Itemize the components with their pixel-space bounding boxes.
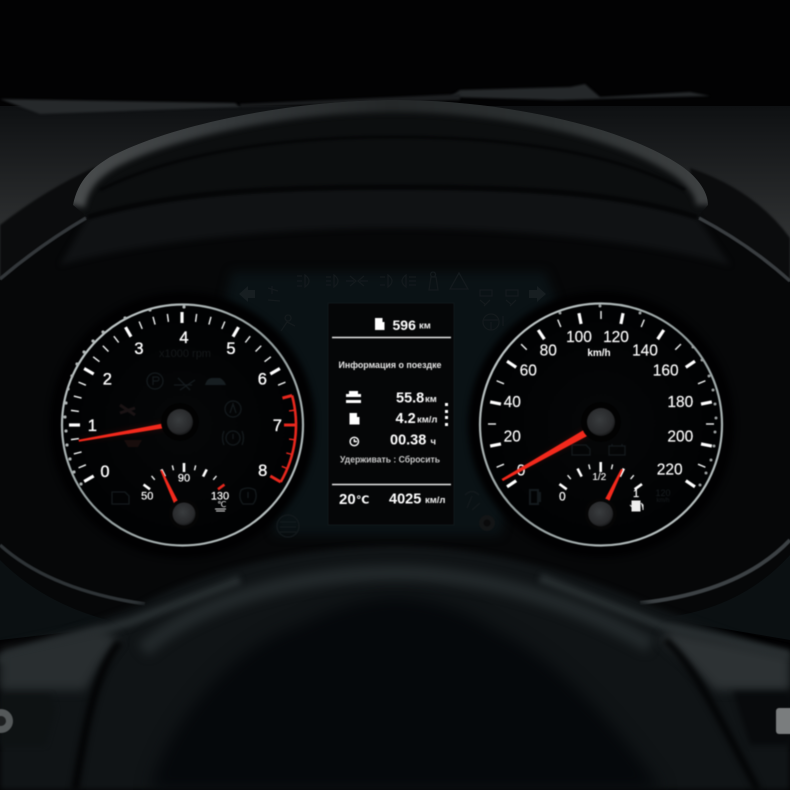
instrument housing [0,167,790,640]
tachometer numerals: 4 [179,329,189,347]
icon: seatbelt warn [120,405,135,415]
time row: ч [430,436,436,448]
tachometer numerals: 0 [100,463,110,481]
trip information heading: Информация о поездке [338,360,442,370]
icon: ABS [225,401,241,417]
fuel gauge labels: 1 [633,488,639,500]
tachometer numerals: 1 [88,417,97,435]
speedometer rim lights [558,304,718,486]
right wheel seam [665,640,758,790]
speedometer numerals: 160 [653,362,679,380]
icon: hazard triangle [450,273,468,289]
icon: car [205,378,226,385]
outside temperature [339,491,369,508]
distance row: км [425,394,437,405]
odometer [389,491,445,507]
right button [776,708,790,734]
icon: power steering [483,314,503,330]
speedometer numerals: 120 [603,329,629,346]
tachometer needle [78,422,168,442]
outside temperature: 20 [339,491,356,508]
fuel economy row: 4.2 [396,411,416,427]
fuel gauge labels [559,472,639,504]
range row [375,317,431,333]
icon: brake [222,431,244,445]
coolant hub [169,499,199,529]
icon: traction off [480,290,492,306]
distance row: 55.8 [396,390,424,406]
icon: wiper [465,492,480,510]
speed unit km/h: km/h [587,348,611,359]
icon: oil [124,440,142,447]
hold to reset hint: Удерживать : Сбросить [340,454,441,464]
right spoke [660,630,790,690]
time row: 00.38 [390,433,426,449]
outside temperature: ℃ [356,494,369,506]
icon: left turn arrow [239,286,255,302]
speedometer numerals: 180 [667,394,694,411]
tachometer numerals: 5 [226,340,236,358]
icon: low beam [326,275,338,287]
range row: 596 [392,317,416,333]
speedometer numerals: 200 [667,428,694,446]
left button [0,709,13,733]
speedometer numerals: 140 [632,342,658,360]
fuel economy row [350,411,437,427]
icon: road [346,391,361,403]
tachometer numerals: 7 [273,417,282,435]
tachometer dim warning icons [112,373,299,537]
speedometer numerals: 60 [520,362,537,380]
fuel needle [604,469,623,504]
speedometer dim warning icons: km/h [656,498,670,504]
fuel gauge labels: 1/2 [592,472,607,483]
coolant labels: ℃ [217,500,226,509]
coolant needle [160,470,180,507]
speedometer needle [502,428,590,481]
icon: lane assist [268,286,280,301]
icon: speed limit: 120 [655,488,671,498]
odometer: 4025 [389,491,421,507]
tachometer red zone [270,395,296,482]
speedometer numerals: 220 [657,462,683,478]
tachometer dial face [62,305,302,545]
speedometer numerals: 40 [504,394,521,411]
speedometer chrome ring [480,304,722,546]
icon: tyre pressure [240,488,256,504]
icon: front fog [380,275,392,287]
speedometer numerals: 20 [504,428,521,446]
right button pocket [733,692,790,745]
coolant labels: 130 [211,491,229,503]
fuel gauge ticks [559,462,642,489]
wheel upper band highlights [0,578,790,660]
speedometer numerals: 100 [566,329,592,346]
speedometer gauge [465,292,734,558]
tachometer hub [161,403,199,441]
icon: door open [174,378,195,390]
odometer: км/л [425,495,445,506]
icon: seatbelt [429,272,438,290]
speedometer numerals [504,329,694,480]
speedometer numerals: 0 [517,462,526,480]
icon: battery [609,444,625,455]
tachometer rim lights [63,305,186,486]
icon: side lights [346,276,368,286]
central trip computer display [328,303,454,525]
icon: engine [112,492,129,504]
wheel rim [0,546,790,790]
icon: knob [479,515,495,531]
coolant labels: 90 [178,472,190,484]
warning lights row [239,272,546,331]
wheel centre pad [150,597,662,790]
range row: км [419,320,431,332]
tachometer numerals [88,329,282,481]
speedometer numerals: 80 [540,342,557,360]
icon: right turn arrow [529,286,546,302]
tachometer chrome ring [62,304,303,546]
icon: low fuel [530,490,540,504]
coolant temperature ticks [144,463,224,489]
tachometer gauge [50,292,316,558]
tachometer numerals: 8 [258,462,267,480]
speedometer dim warning icons [465,444,671,531]
warning-light panel backing [225,272,556,535]
speedometer minor ticks [488,311,714,467]
icon: traction [506,290,518,306]
icon: parking brake [147,373,163,389]
fuel hub [585,498,617,530]
steering wheel [0,546,790,790]
coolant labels [141,472,229,511]
icon: high beam [297,275,309,287]
tachometer numerals: 2 [103,370,112,388]
icon: rear fog [402,275,416,287]
coolant labels: 50 [141,491,153,503]
icon: fuel pump [630,501,643,511]
page dots [445,403,448,426]
distance row [346,390,437,406]
time row [350,433,436,449]
unit label x1000rpm: x1000 rpm [159,348,211,360]
instrument hood [73,100,708,218]
fuel gauge labels: 0 [559,490,566,504]
tachometer numerals: 3 [134,340,144,358]
speedometer dial face [481,304,721,544]
icon: check engine [572,445,590,455]
fuel economy row: км/л [417,414,437,426]
speedometer major ticks [490,313,712,487]
left button pocket [0,695,55,745]
speedometer hub [581,402,621,442]
icon: clock [350,437,358,446]
tachometer numerals: 6 [258,370,267,388]
left spoke [0,628,120,690]
tachometer white ticks [69,312,285,482]
icon: ESP [277,515,299,537]
icon: airbag [281,315,295,331]
icon: fuel pump [350,413,360,424]
left wheel seam [75,642,120,790]
wheel ridge highlight [143,573,650,650]
icon: fuel pump [375,318,384,330]
